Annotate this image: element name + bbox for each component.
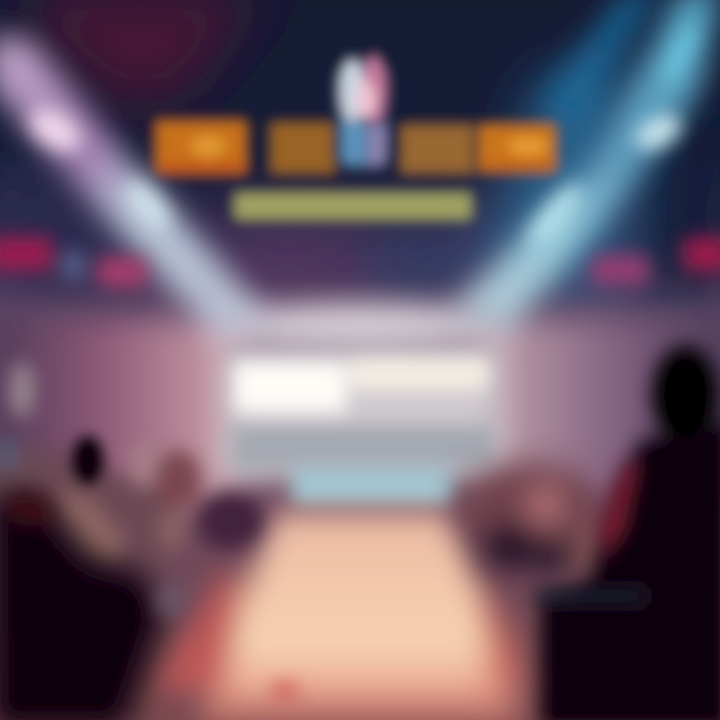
right person head xyxy=(651,345,719,445)
beam: left spotlight xyxy=(0,35,270,335)
left person head xyxy=(71,435,105,485)
light hotspots xyxy=(23,21,702,251)
right crowd teal rail xyxy=(535,588,645,604)
subtitle bar xyxy=(234,192,472,220)
screen: bright scoreboard xyxy=(222,345,502,504)
upper stands haze xyxy=(0,304,720,510)
left crowd dark foreground xyxy=(0,490,165,720)
red floor spot xyxy=(271,680,299,700)
orange banner blocks xyxy=(155,120,556,174)
crowd: left xyxy=(0,362,264,720)
icon: league logo xyxy=(336,54,390,170)
court floor xyxy=(150,512,525,720)
court-side blue panel xyxy=(292,468,452,504)
left crowd maroon accent xyxy=(6,494,54,526)
left crowd upper figures xyxy=(0,362,264,570)
right crowd mid figures xyxy=(458,462,602,574)
banner highlights xyxy=(160,135,552,172)
title graphic: orange glowing banner xyxy=(155,120,556,174)
banner strips left and right xyxy=(0,238,720,286)
red jersey stripe xyxy=(600,460,640,560)
right person dark body xyxy=(540,420,720,720)
beam: right spotlight xyxy=(450,0,720,330)
crowd: right xyxy=(458,345,720,720)
beam: right secondary blue xyxy=(545,0,660,135)
spotlight beams xyxy=(0,0,720,335)
ceiling colour glows xyxy=(0,0,720,290)
